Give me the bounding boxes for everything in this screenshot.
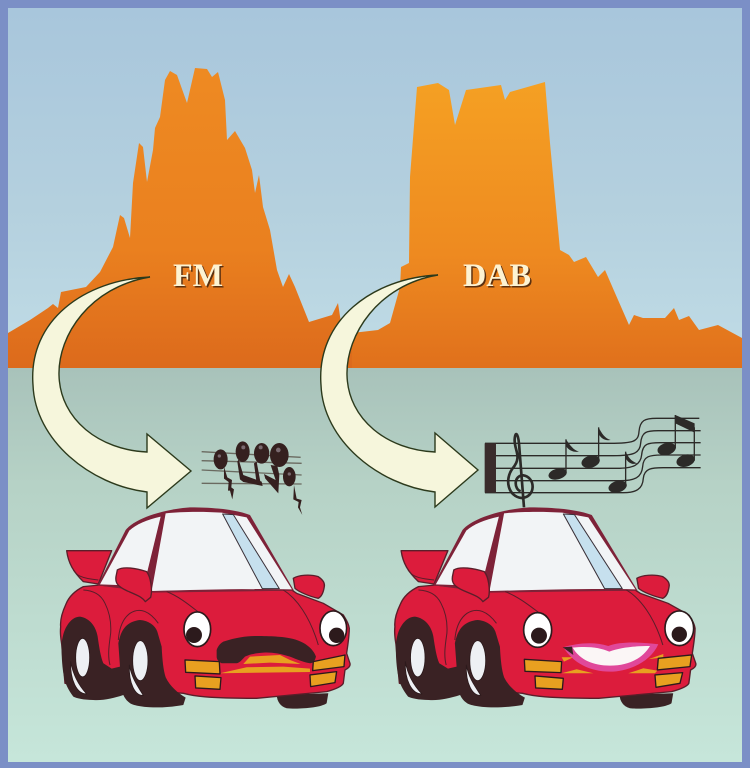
grille flashes bbox=[562, 669, 593, 673]
lamps bbox=[524, 655, 692, 689]
lamps bbox=[185, 655, 345, 689]
grille bbox=[243, 655, 301, 664]
arrow: FM to car bbox=[33, 277, 191, 508]
roof and pillars bbox=[98, 507, 294, 593]
roof and pillars bbox=[433, 507, 638, 593]
FM signal mountain bbox=[8, 68, 366, 368]
body bbox=[395, 585, 696, 698]
windscreen reflection bbox=[223, 514, 279, 589]
car: FM, unhappy bbox=[60, 507, 350, 709]
moustache mouth bbox=[217, 636, 316, 663]
hubs bbox=[71, 638, 148, 695]
body lines bbox=[408, 570, 663, 665]
tyres bbox=[62, 617, 186, 707]
label: FM: FM bbox=[173, 258, 223, 294]
right mirror bbox=[293, 575, 324, 598]
staff bar bbox=[485, 443, 496, 493]
car body group bbox=[395, 507, 696, 709]
car: DAB, happy bbox=[395, 507, 696, 709]
hubs bbox=[405, 638, 486, 695]
right front tyre bbox=[620, 693, 673, 709]
left mirror bbox=[116, 568, 151, 602]
spoiler bbox=[67, 551, 112, 584]
side window bbox=[436, 517, 499, 585]
arrow: DAB to car bbox=[321, 275, 478, 507]
windscreen bbox=[490, 512, 635, 591]
DAB signal mountain bbox=[352, 82, 742, 368]
clean music: DAB bbox=[485, 415, 701, 507]
eyes bbox=[524, 613, 552, 647]
treble clef bbox=[508, 434, 533, 507]
right mirror bbox=[637, 575, 669, 598]
spoiler bbox=[401, 551, 448, 584]
windscreen reflection bbox=[563, 514, 622, 589]
label: DAB: DAB bbox=[463, 258, 531, 294]
label: FM: FM bbox=[174, 260, 224, 296]
body bbox=[60, 585, 350, 698]
tyres bbox=[396, 617, 525, 707]
eyes bbox=[184, 612, 211, 647]
windscreen bbox=[152, 512, 292, 591]
sky bbox=[8, 8, 742, 368]
distorted music: FM bbox=[202, 441, 302, 515]
smiling mouth bbox=[563, 643, 658, 672]
right front tyre bbox=[277, 693, 328, 709]
body lines bbox=[73, 570, 318, 665]
ground bbox=[8, 367, 742, 762]
label: DAB: DAB bbox=[464, 260, 532, 296]
side window bbox=[100, 517, 161, 585]
left mirror bbox=[452, 568, 489, 602]
